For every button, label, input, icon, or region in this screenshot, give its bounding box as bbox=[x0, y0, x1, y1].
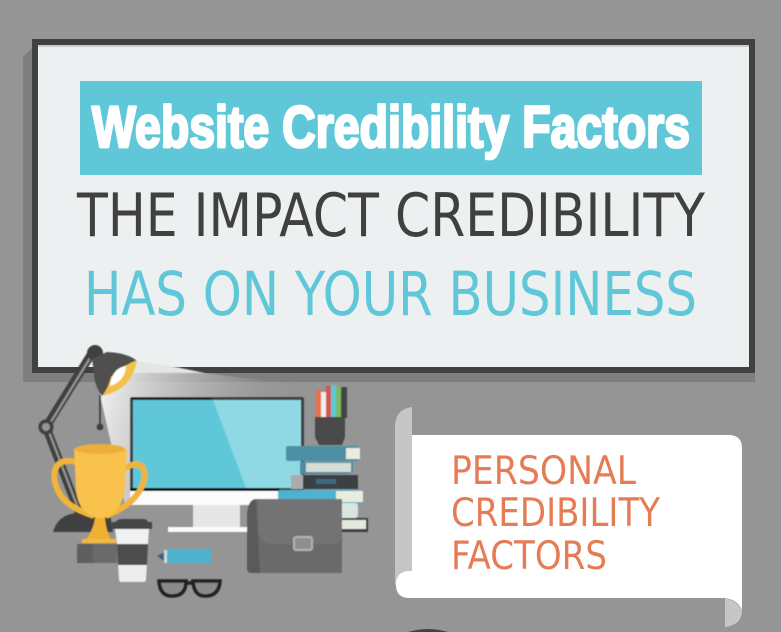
heading: personal credibility factors: PERSONAL bbox=[451, 449, 636, 494]
next section circle edge bbox=[408, 629, 448, 632]
icon: pencil cup bbox=[315, 385, 347, 445]
heading: personal credibility factors: FACTORS bbox=[451, 534, 607, 579]
icon: desk lamp bbox=[40, 345, 137, 532]
icon: blue marker bbox=[157, 549, 211, 563]
heading: personal credibility factors: CREDIBILITY bbox=[451, 491, 660, 536]
lamp light beam bbox=[100, 361, 300, 505]
illustration: desk objects bbox=[40, 345, 368, 596]
icon: trophy bbox=[54, 444, 145, 563]
icon: coffee cup bbox=[112, 519, 152, 582]
icon: book stack bbox=[278, 446, 368, 532]
panel: personal credibility ribbon bbox=[395, 407, 742, 627]
icon: briefcase bbox=[247, 499, 342, 573]
title banner bbox=[80, 81, 702, 175]
icon: computer monitor bbox=[130, 397, 304, 532]
heading: personal credibility factors bbox=[451, 449, 660, 579]
panel: title board bbox=[23, 39, 755, 382]
icon: glasses bbox=[159, 581, 220, 596]
